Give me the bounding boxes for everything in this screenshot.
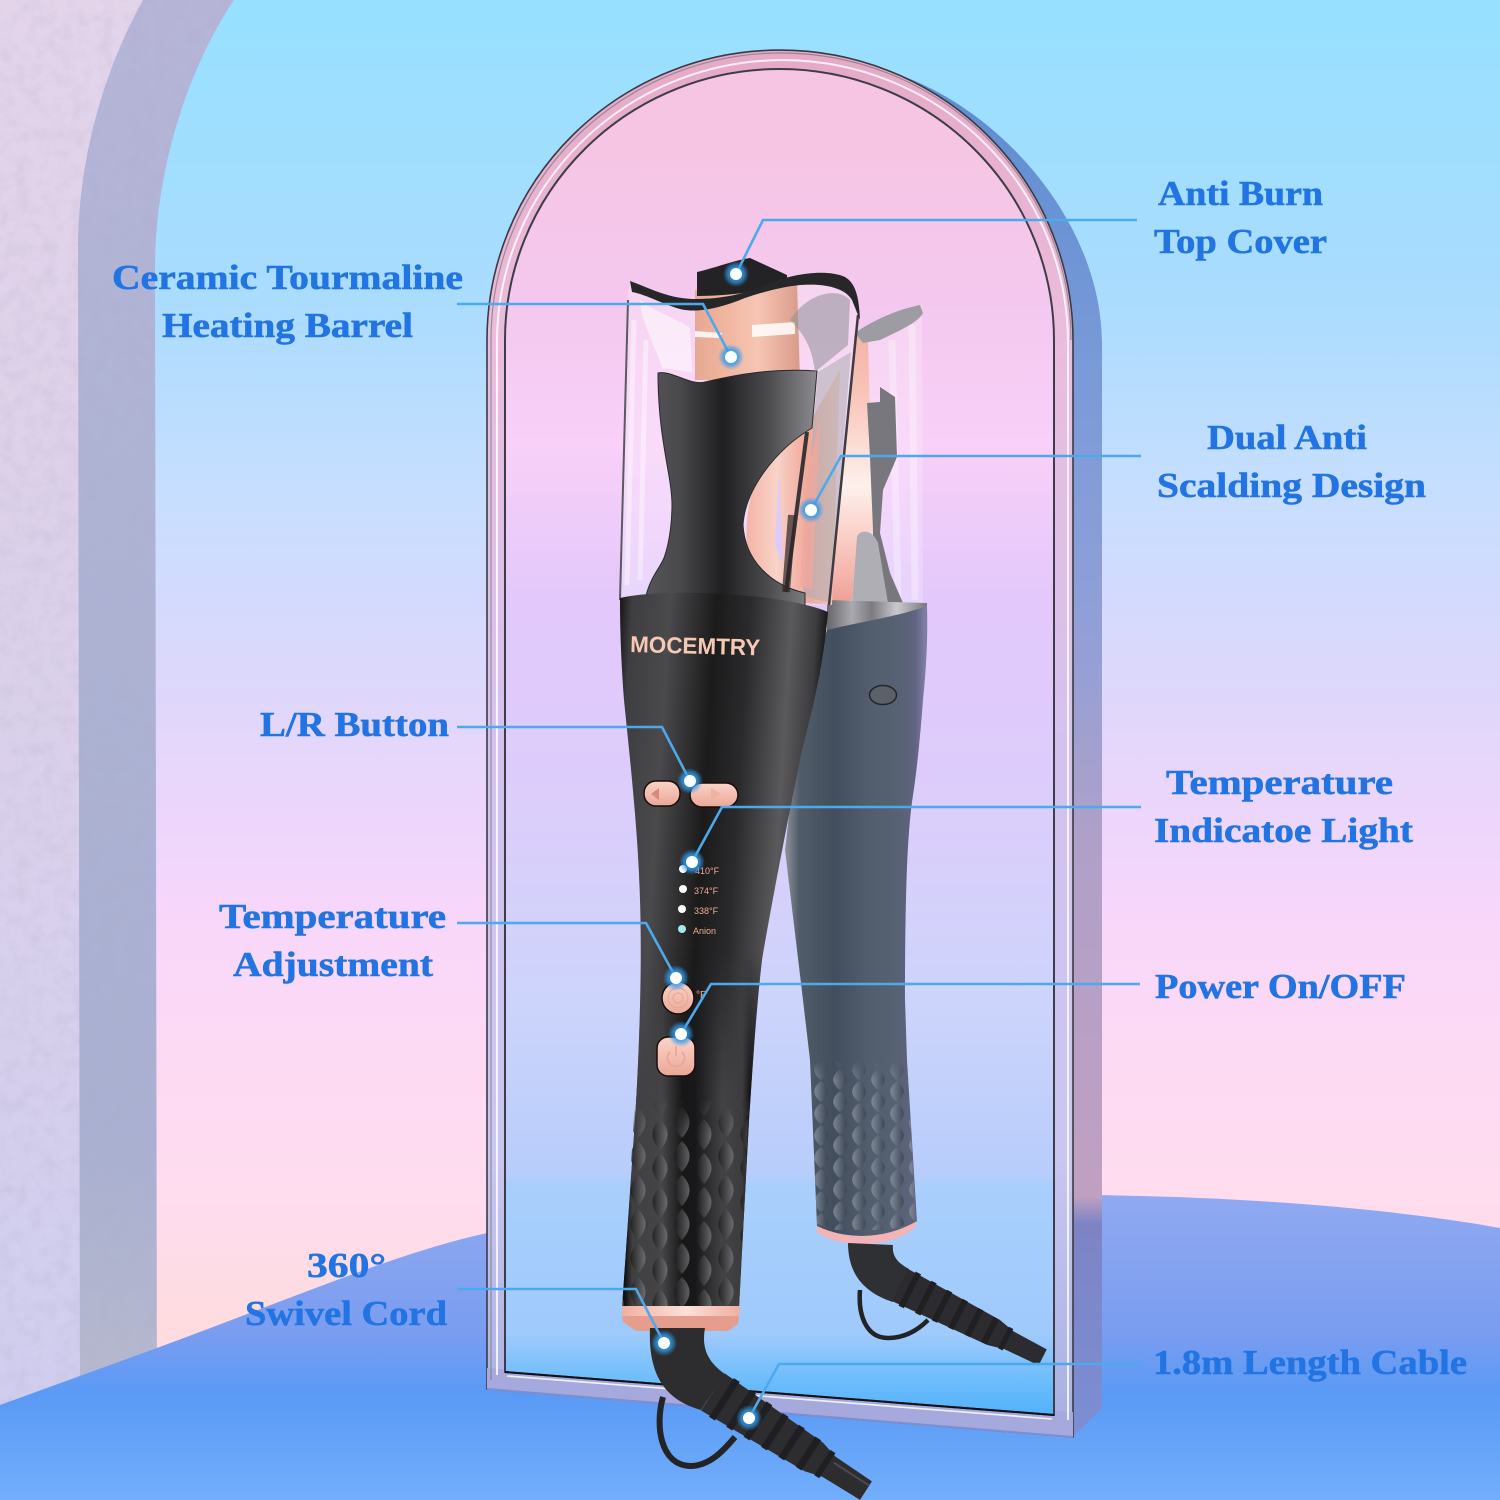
gray curler pink band: [817, 1221, 917, 1244]
chamber rim: [630, 273, 860, 320]
glass streaks left: [627, 320, 646, 585]
label: 360 swivel cord: 360°: [307, 1246, 386, 1285]
label: dual anti scalding design: Dual Anti: [1207, 418, 1367, 457]
handle body: [620, 593, 828, 1308]
label: ceramic tourmaline heating barrel: [112, 258, 463, 345]
gray curler body: [785, 606, 927, 1236]
temperature indicators: 374°F: [694, 886, 719, 896]
direction buttons: [644, 781, 738, 807]
temperature indicators: 410°F: [695, 866, 720, 876]
temperature indicators: 338°F: [694, 906, 719, 916]
label: temperature indicator light: Indicatoe Light: [1154, 811, 1413, 850]
temperature button: °F: [696, 990, 706, 1001]
label: l/r button: L/R Button: [260, 705, 449, 744]
main black curler: [620, 258, 878, 1500]
barrel inside cut-out: [746, 370, 840, 605]
glass highlights and fog: [640, 300, 692, 372]
label: temperature adjustment: [219, 897, 446, 984]
label: ceramic tourmaline heating barrel: Ceramic Tourmaline: [112, 258, 463, 297]
leader: swivel cord: [457, 1289, 664, 1343]
gray curler arm: [855, 305, 923, 343]
silver glass band: [803, 352, 851, 603]
gray curler base ring: [827, 600, 927, 632]
power button: [657, 1037, 695, 1076]
label: anti burn top cover: Top Cover: [1154, 222, 1327, 261]
label: temperature indicator light: Temperature: [1166, 763, 1393, 802]
callout dots: [651, 261, 824, 1431]
lower handle shading: [622, 966, 762, 1306]
heating barrel: [695, 282, 800, 380]
inner rod: [786, 432, 807, 592]
glass chamber of gray curler: [852, 305, 923, 605]
glass chamber: [620, 272, 858, 605]
label: 360 swivel cord: [245, 1246, 448, 1333]
leader: temperature light: [692, 807, 1141, 862]
temperature indicators: Anion: [693, 926, 716, 936]
label: anti burn top cover: [1154, 174, 1327, 261]
label: dual anti scalding design: Scalding Design: [1157, 466, 1426, 505]
leader: anti burn top cover: [736, 220, 1137, 274]
mirror glass: [505, 69, 1054, 1415]
blue floor: [0, 1194, 1500, 1500]
gray curler behind: [785, 305, 1051, 1374]
arched wall at left: [0, 0, 234, 1420]
label: dual anti scalding design: [1157, 418, 1426, 505]
label: 360 swivel cord: Swivel Cord: [245, 1294, 448, 1333]
brand logo: MOCEMTRY: [630, 631, 761, 660]
gray curler neck and cable: [848, 1243, 1051, 1374]
temperature indicators: [678, 865, 720, 936]
mirror frame: [487, 50, 1073, 1437]
label: anti burn top cover: Anti Burn: [1158, 174, 1323, 213]
leader: l/r button: [457, 727, 690, 781]
arched mirror: [487, 50, 1102, 1437]
leader: ceramic barrel: [457, 304, 731, 357]
gray curler button: [870, 686, 896, 704]
temperature button: [662, 982, 706, 1014]
label: temperature adjustment: Adjustment: [233, 945, 433, 984]
mirror side face: [905, 77, 1102, 1437]
label: temperature indicator light: [1154, 763, 1413, 850]
label: cable length: 1.8m Length Cable: [1153, 1343, 1467, 1382]
top cover: [697, 258, 787, 296]
pink band: [622, 1306, 740, 1331]
inner dark cylinder: [645, 370, 817, 605]
gray curler fins: [867, 387, 903, 603]
leader: dual anti scalding: [811, 456, 1141, 510]
leader: cable length: [749, 1364, 1140, 1418]
leader: temperature adjustment: [457, 923, 676, 978]
leader: power: [681, 984, 1140, 1034]
neck and swivel cable: [650, 1328, 878, 1500]
label: temperature adjustment: Temperature: [219, 897, 446, 936]
label: power on/off: Power On/OFF: [1155, 967, 1406, 1006]
gray curler barrel: [828, 335, 873, 605]
label: ceramic tourmaline heating barrel: Heating Barrel: [162, 306, 413, 345]
grip texture: [622, 1100, 749, 1308]
